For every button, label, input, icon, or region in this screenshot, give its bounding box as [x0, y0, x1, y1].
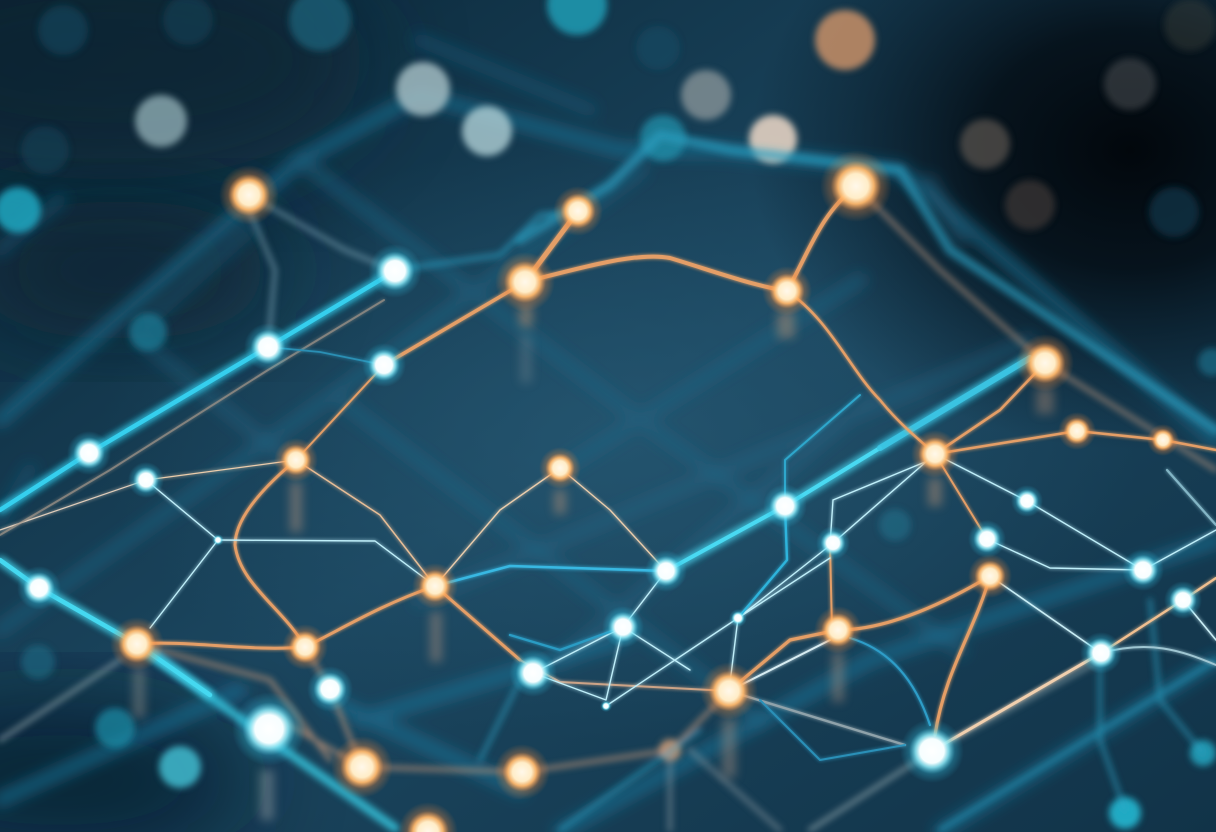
connection lines: cyan beams	[0, 271, 1030, 695]
connection lines: orange links	[0, 186, 1216, 735]
orange glowing nodes	[110, 150, 1179, 832]
reflections under nodes	[133, 305, 1054, 820]
connection lines: white and cyan thin links	[146, 347, 1216, 760]
white and cyan glowing nodes	[17, 244, 1202, 783]
